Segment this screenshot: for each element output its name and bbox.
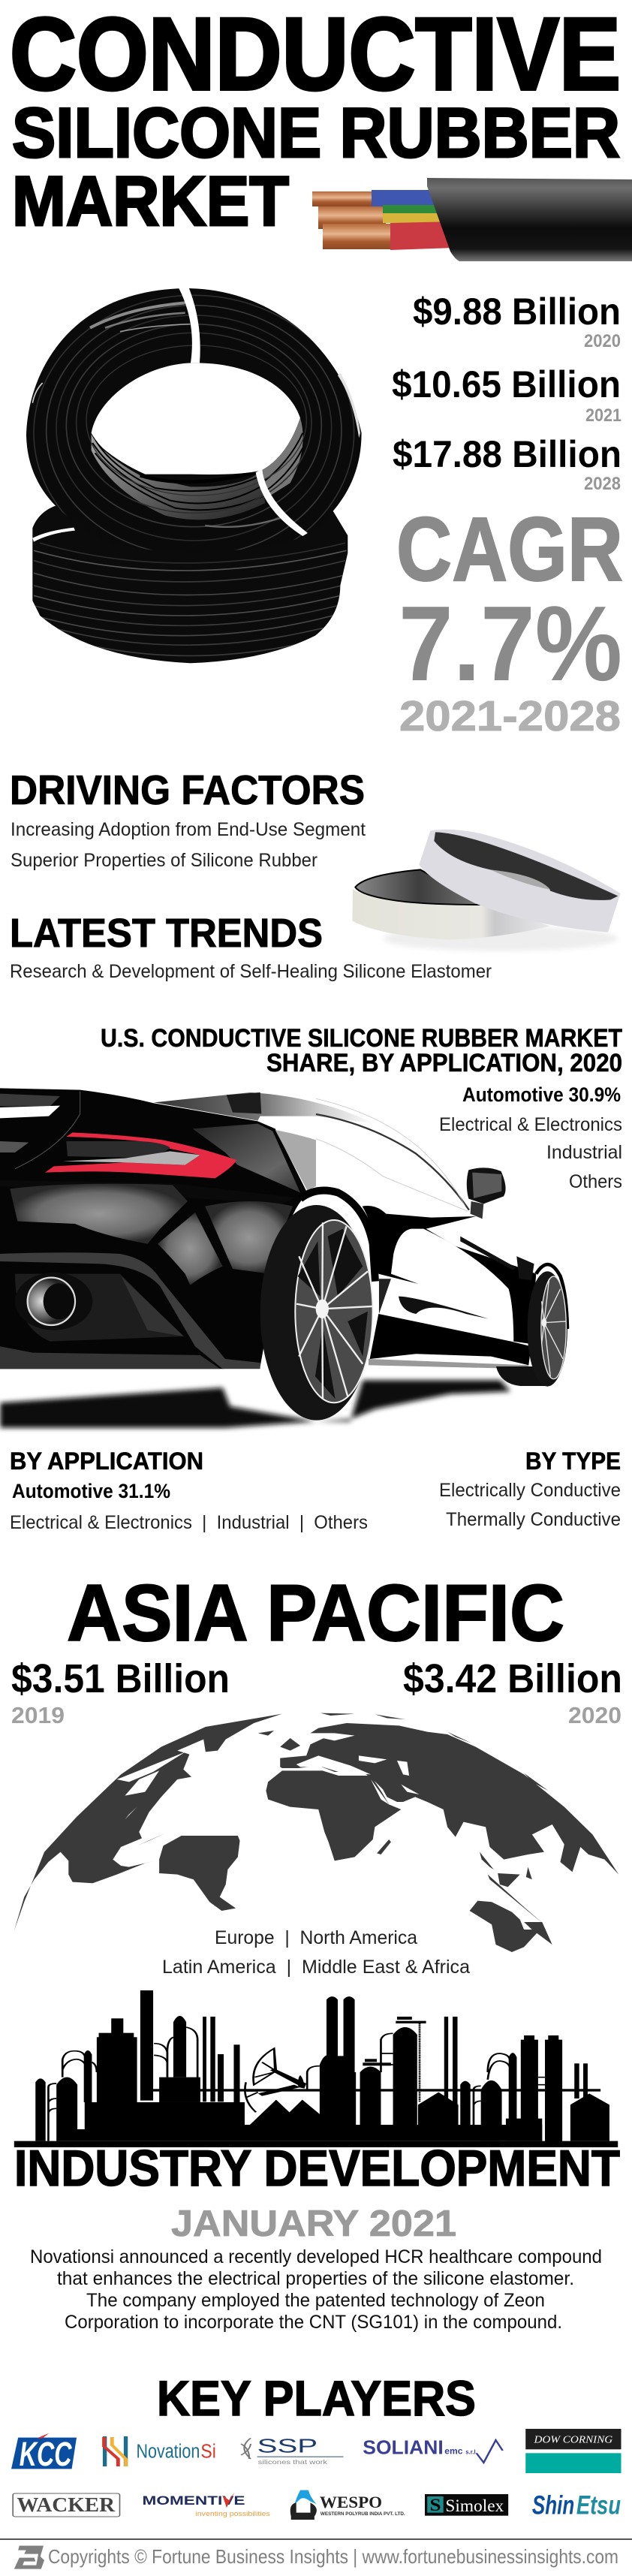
U.S. application list	[439, 1083, 622, 1192]
logo: Dow Corning	[525, 2429, 621, 2473]
by application	[10, 1448, 368, 1533]
latest trends	[10, 911, 492, 982]
logo: Wespo	[290, 2490, 405, 2520]
door and sill reflections	[363, 1206, 536, 1369]
U.S. application list: Electrical & Electronics	[439, 1114, 622, 1135]
by type: BY TYPE	[525, 1448, 621, 1475]
by type	[439, 1448, 621, 1530]
icon: industrial skyline	[14, 1990, 618, 2147]
windscreen lines	[316, 1098, 469, 1211]
rear body	[0, 1088, 375, 1369]
2021 value: $10.65 Billion	[392, 363, 621, 405]
logo: Soliani EMC: SOLIANI	[363, 2437, 444, 2458]
Asia Pacific 2020 value: 2020	[568, 1702, 621, 1728]
ground shadow	[0, 1380, 510, 1428]
regions list	[162, 1927, 470, 1978]
logo: Momentive	[143, 2492, 270, 2517]
illustration: black sports car	[0, 1088, 567, 1428]
illustration: silicone rings	[352, 830, 621, 951]
logo: NovationSi: Si	[200, 2441, 216, 2462]
key players heading: KEY PLAYERS	[157, 2370, 476, 2426]
by type: Electrically Conductive	[439, 1480, 621, 1501]
logo: Simolex	[425, 2494, 508, 2516]
latest trends: LATEST TRENDS	[10, 911, 323, 956]
body panel reflections	[10, 1184, 188, 1244]
logo: Soliani EMC: emc	[444, 2447, 463, 2456]
side mirror	[467, 1167, 506, 1219]
2028 value: $17.88 Billion	[393, 433, 621, 475]
development description	[30, 2246, 602, 2333]
Asia Pacific heading: ASIA PACIFIC	[67, 1568, 564, 1658]
by type: Thermally Conductive	[446, 1509, 621, 1530]
U.S. application list: Others	[569, 1171, 622, 1192]
2021 value: 2021	[585, 405, 621, 426]
Asia Pacific 2019 value	[11, 1656, 230, 1728]
logo: NovationSi	[103, 2436, 216, 2466]
regions list: Europe | North America	[215, 1927, 417, 1948]
market size figures	[392, 291, 621, 494]
2020 value: 2020	[584, 331, 621, 351]
CAGR callout: 2021-2028	[399, 692, 621, 740]
development description: The company employed the patented technology of Zeon	[86, 2290, 545, 2311]
2020 value: $9.88 Billion	[413, 291, 621, 333]
Asia Pacific 2019 value: $3.51 Billion	[11, 1656, 230, 1701]
world map globe	[14, 1713, 618, 1952]
Asia Pacific 2019 value: 2019	[11, 1702, 65, 1728]
driving factors: Increasing Adoption from End-Use Segment	[11, 819, 366, 840]
logo: Simolex: Simolex	[445, 2496, 504, 2515]
2020 value	[413, 291, 621, 351]
Asia Pacific 2020 value	[403, 1656, 622, 1728]
date: January 2021: JANUARY 2021	[171, 2204, 456, 2244]
by application: Automotive 31.1%	[12, 1480, 170, 1502]
upper coil	[26, 288, 362, 571]
latest trends: Research & Development of Self-Healing Silicone Elastomer	[10, 961, 492, 982]
CAGR callout	[396, 498, 623, 740]
logo: Wespo: WESPO	[320, 2493, 382, 2511]
by application: BY APPLICATION	[10, 1448, 203, 1475]
logo: Wacker: WACKER	[17, 2493, 115, 2516]
bumper	[0, 1252, 260, 1369]
illustration: cable coils	[26, 288, 362, 663]
2028 value: 2028	[584, 474, 621, 494]
exhaust	[15, 1273, 92, 1330]
2021 value	[392, 363, 621, 426]
key player logos	[11, 2429, 621, 2520]
development description: Novationsi announced a recently developed HCR healthcare compound	[30, 2246, 602, 2267]
development description: that enhances the electrical properties of the silicone elastomer.	[57, 2268, 574, 2289]
driving factors	[10, 767, 366, 871]
rear wheel	[260, 1191, 375, 1421]
U.S. market share heading	[101, 1024, 622, 1077]
regions list: Latin America | Middle East & Africa	[162, 1957, 470, 1978]
logo: SSP	[241, 2436, 344, 2466]
key player logos: KCC	[20, 2435, 72, 2473]
lower coil	[32, 503, 348, 663]
logo: Momentive: inventing possibilities	[195, 2510, 270, 2517]
logo: SSP: silicones that work	[258, 2459, 328, 2466]
logo: Shin-Etsu: Shin	[532, 2490, 574, 2520]
driving factors: DRIVING FACTORS	[10, 767, 365, 813]
U.S. application list: Industrial	[546, 1142, 622, 1163]
U.S. application list: Automotive 30.9%	[462, 1083, 621, 1106]
title: MARKET	[12, 161, 289, 240]
logo: Simolex: S	[429, 2495, 441, 2514]
driving factors: Superior Properties of Silicone Rubber	[11, 850, 318, 871]
development description: Corporation to incorporate the CNT (SG101) in the compound.	[65, 2312, 562, 2333]
logo: SSP: SSP	[257, 2436, 318, 2457]
logo: Wacker	[13, 2493, 119, 2517]
tail light	[45, 1132, 236, 1178]
by application: Electrical & Electronics | Industrial | Others	[10, 1512, 368, 1533]
logo: Soliani EMC: s.r.l	[465, 2449, 476, 2456]
front wheel	[496, 1264, 567, 1387]
title	[10, 0, 621, 240]
logo: Momentive: MOMENTIVE	[143, 2493, 245, 2508]
logo: NovationSi: Novation	[137, 2441, 200, 2462]
footer rule	[0, 2538, 632, 2540]
icon: stripped power cable	[312, 178, 632, 261]
logo: KCC	[11, 2433, 77, 2473]
logo: Wespo: WESTERN POLYRUB INDIA PVT. LTD.	[321, 2511, 405, 2516]
2028 value	[393, 433, 621, 494]
icon: Fortune Business Insights logo	[14, 2546, 44, 2569]
